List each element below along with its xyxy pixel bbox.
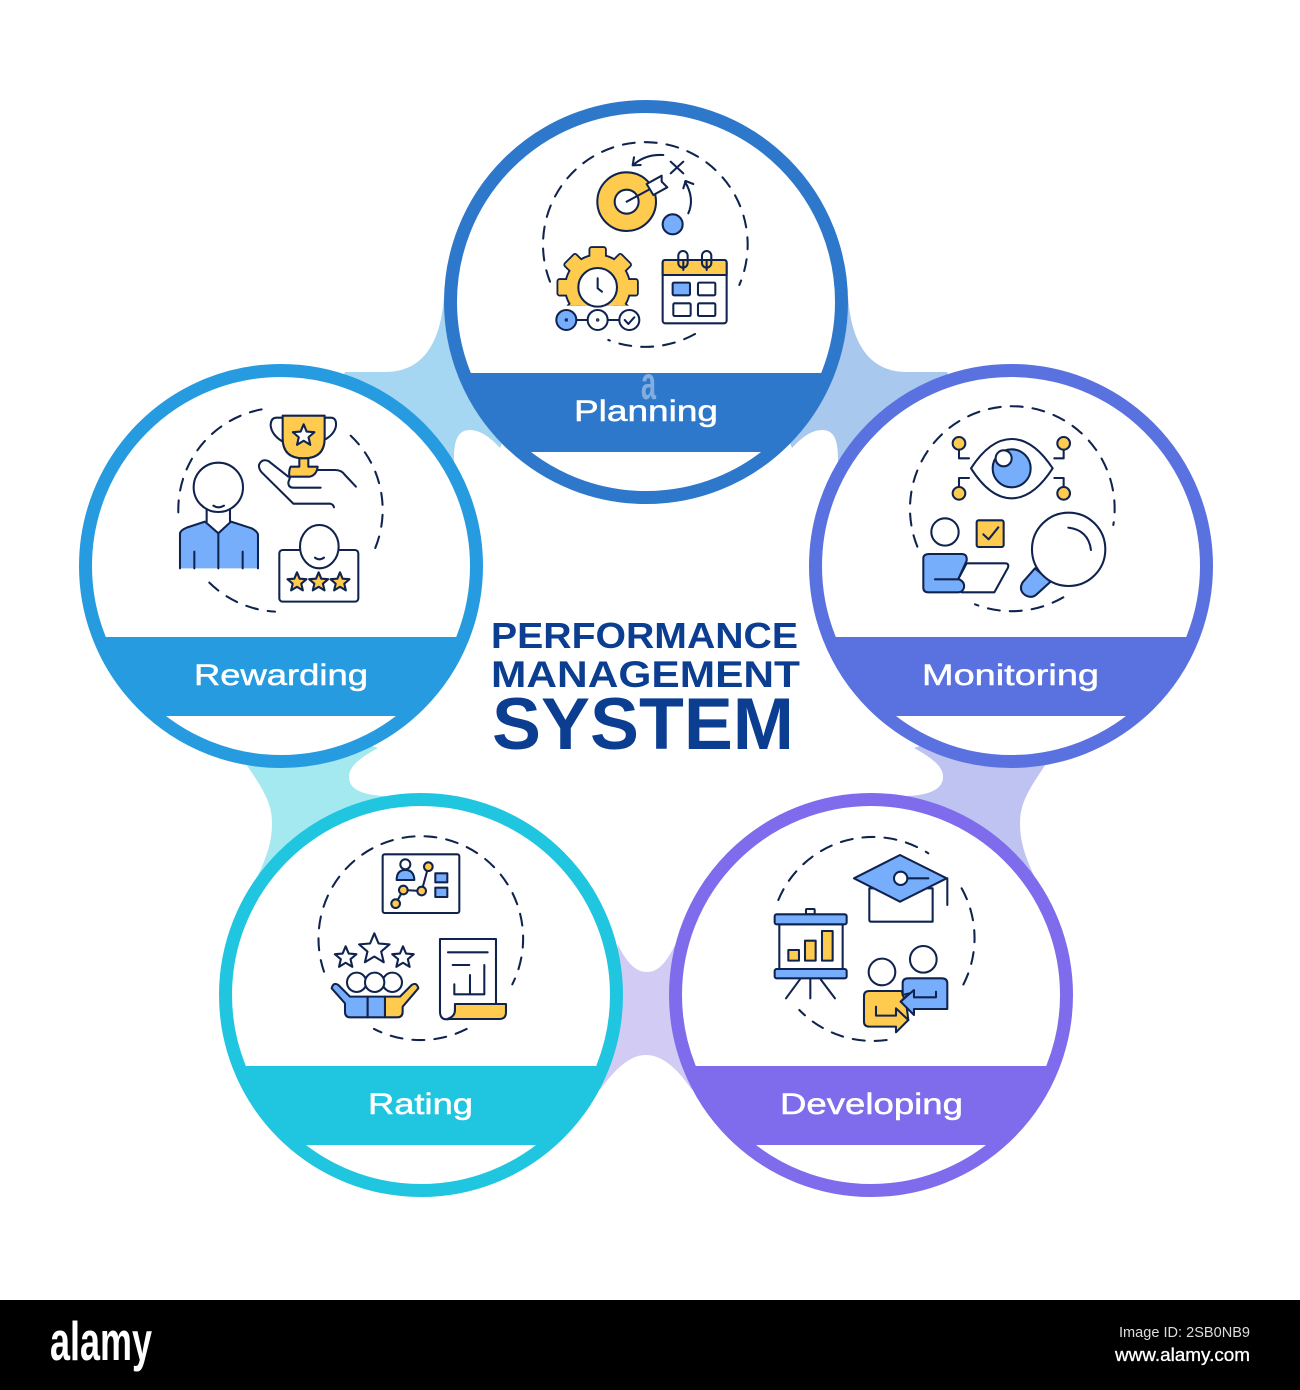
title: MANAGEMENT	[491, 654, 800, 695]
title	[491, 615, 800, 765]
icon: board, team stars and report	[318, 836, 523, 1040]
label: planning: Planning	[574, 395, 718, 428]
connector: planning to rewarding	[340, 296, 520, 480]
connector: rewarding to rating	[238, 720, 400, 880]
connector: monitoring to developing	[892, 720, 1054, 880]
band: planning	[468, 373, 824, 452]
icon: trophy, person and rating card	[178, 409, 383, 612]
label: rating: Rating	[368, 1088, 473, 1121]
band: rewarding	[103, 637, 459, 716]
ring: developing	[676, 800, 1066, 1190]
footer bar	[0, 1300, 1300, 1390]
panel: planning	[450, 106, 842, 498]
panel: rating	[226, 800, 616, 1190]
footer logo: alamy	[50, 1310, 152, 1372]
panel: monitoring	[816, 370, 1206, 762]
label: developing: Developing	[780, 1088, 963, 1121]
panel: rewarding	[86, 370, 476, 762]
title: PERFORMANCE	[491, 615, 798, 656]
icon: eye, worker and magnifier	[910, 406, 1115, 611]
icon: target, gear and calendar	[543, 142, 748, 347]
footer image id: Image ID: 2SB0NB9	[1119, 1324, 1250, 1341]
ring: rewarding	[86, 370, 476, 762]
footer url: www.alamy.com	[1114, 1345, 1250, 1365]
band: developing	[693, 1066, 1049, 1145]
watermark letter: a	[641, 357, 656, 409]
band: rating	[243, 1066, 599, 1145]
label: monitoring: Monitoring	[922, 659, 1099, 692]
label: rewarding: Rewarding	[194, 659, 368, 692]
connector: rating to developing	[600, 945, 692, 1090]
ring: rating	[226, 800, 616, 1190]
connector: planning to monitoring	[772, 296, 952, 480]
panel: developing	[676, 800, 1066, 1190]
title: SYSTEM	[492, 684, 794, 765]
band: monitoring	[833, 637, 1189, 716]
ring: planning	[450, 106, 842, 498]
ring: monitoring	[816, 370, 1206, 762]
icon: graduation cap, presentation board and mentoring	[775, 837, 975, 1041]
